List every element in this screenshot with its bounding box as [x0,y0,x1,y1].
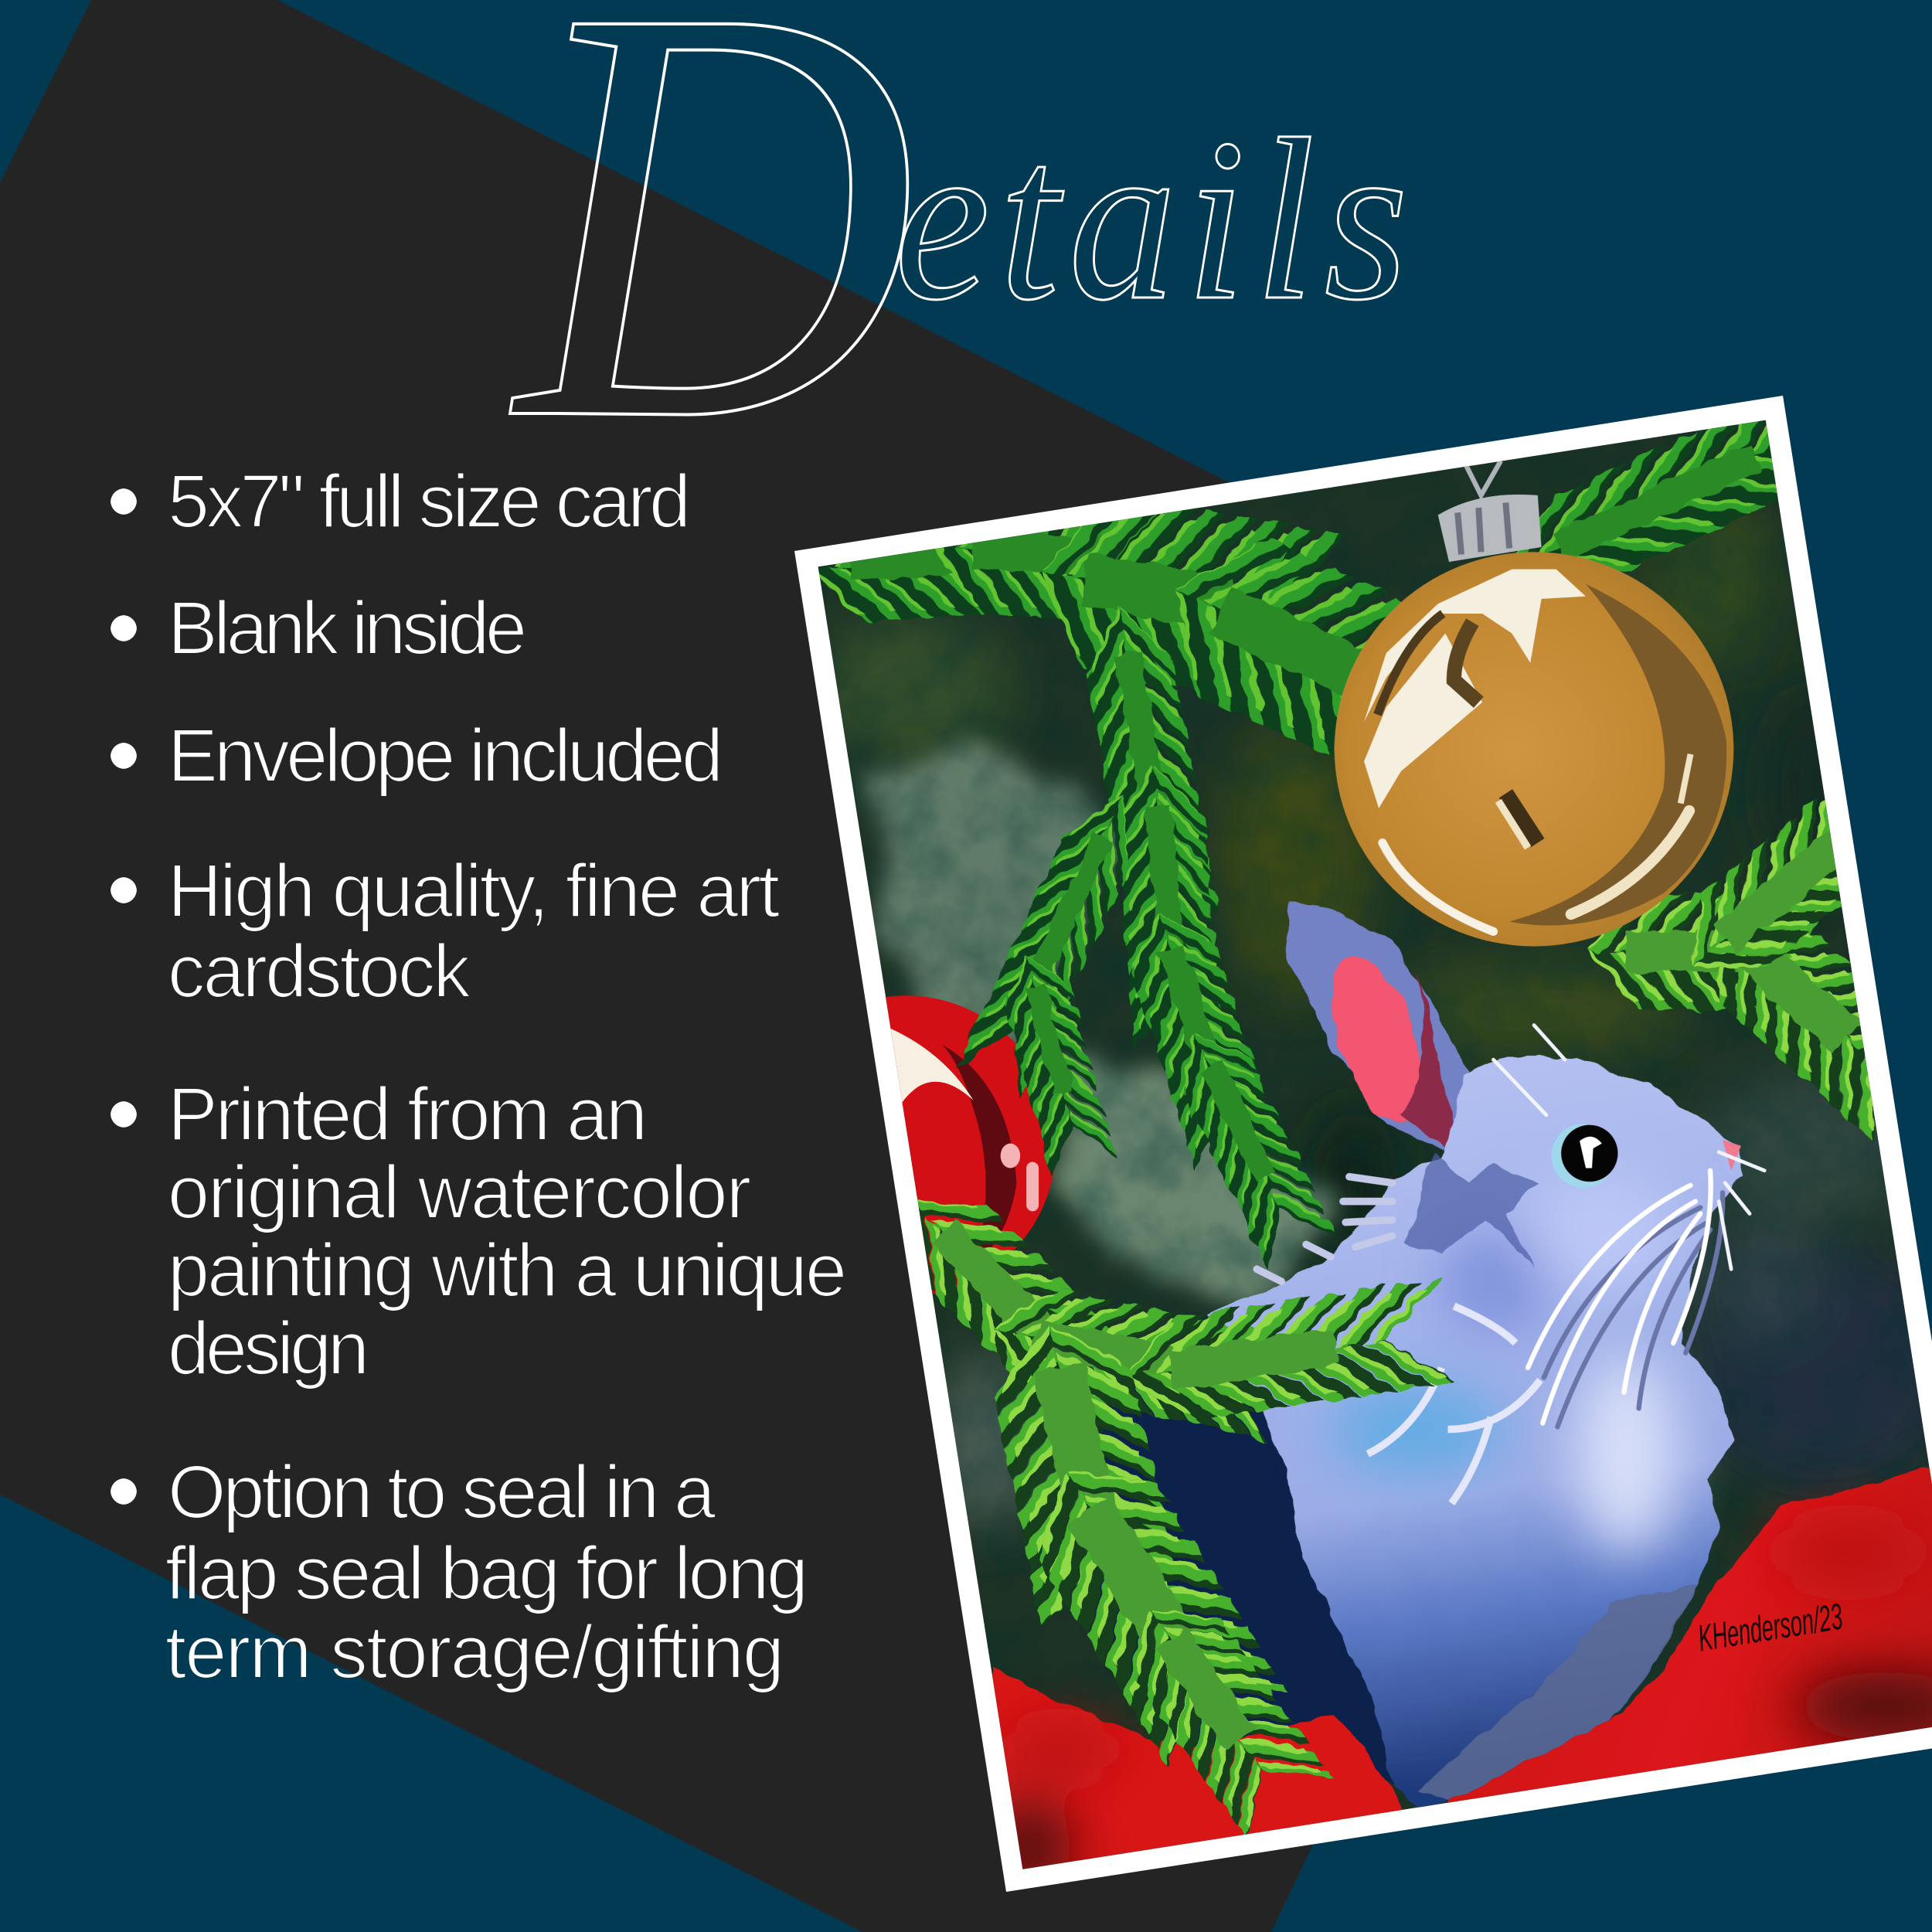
title: etails [894,91,1408,348]
branch: lower strand tip [1140,1611,1298,1804]
fabric: right fold [1441,1454,1932,1849]
item: printed from watercolor: Printed from an [168,1072,648,1156]
item: printed from watercolor: design [168,1306,369,1390]
item: cardstock: High quality, fine art [168,849,780,933]
fabric: left fold [992,1668,1430,1897]
pine branches over rabbit and fabric [911,1201,1420,1804]
red fabric [986,1454,1932,1897]
item: printed from watercolor: painting with a unique [168,1228,847,1312]
fabric shading [986,1522,1932,1897]
rabbit ear [1284,902,1472,1152]
ornament ball [1335,552,1733,946]
item: seal bag: Option to seal in a [168,1450,716,1534]
item: printed from watercolor: original watercolor [168,1150,751,1234]
branch: lower strand [1021,1342,1141,1591]
branch: top left [829,515,1178,595]
branch: hanging left strand [985,811,1128,1150]
item: printed from watercolor [110,1072,847,1390]
ball highlights [1364,570,1586,722]
branch: hanging right strand [1102,629,1309,1240]
branch: bottom left [911,1201,1125,1415]
painting background washes [788,394,1932,1885]
painting [755,389,1932,1897]
item: seal bag: flap seal bag for long [165,1531,808,1615]
item: seal bag [110,1450,808,1694]
rabbit whiskers [1493,1026,1764,1427]
item: cardstock [110,849,780,1013]
item: seal bag: term storage/gifting [165,1610,784,1694]
pine branches behind rabbit [829,389,1913,1240]
item: card size: 5x7" full size card [168,459,691,543]
red ornament [886,995,1056,1294]
rabbit nose [1723,1140,1741,1171]
ornament hanger loop [1466,461,1501,495]
card: white frame [794,396,1932,1892]
branch: right [1610,778,1913,1103]
rabbit [1204,902,1764,1809]
item: envelope: Envelope included [168,713,723,798]
branch: bottom right tip [1146,1310,1420,1399]
rabbit neck fur tuft [1257,1177,1393,1281]
branch: lower strand middle [1050,1474,1243,1723]
ornament cap [1438,495,1542,562]
branch: top center [1058,532,1464,754]
rabbit eye [1551,1124,1617,1188]
item: cardstock: cardstock [168,929,471,1013]
bullet list [110,459,847,1694]
rabbit fur marks [1368,1306,1540,1503]
rabbit fur shading [1331,1171,1675,1553]
rabbit body [1204,1057,1743,1809]
item: blank inside: Blank inside [168,586,527,670]
branch: top right [1523,389,1862,583]
branch: bottom horizontal [1011,1308,1257,1409]
rabbit cheek shadow [1405,1152,1540,1269]
gold ornament [1335,461,1733,946]
ball dark reflection [1509,584,1726,925]
navy shadow under lower branch [1084,1380,1430,1811]
